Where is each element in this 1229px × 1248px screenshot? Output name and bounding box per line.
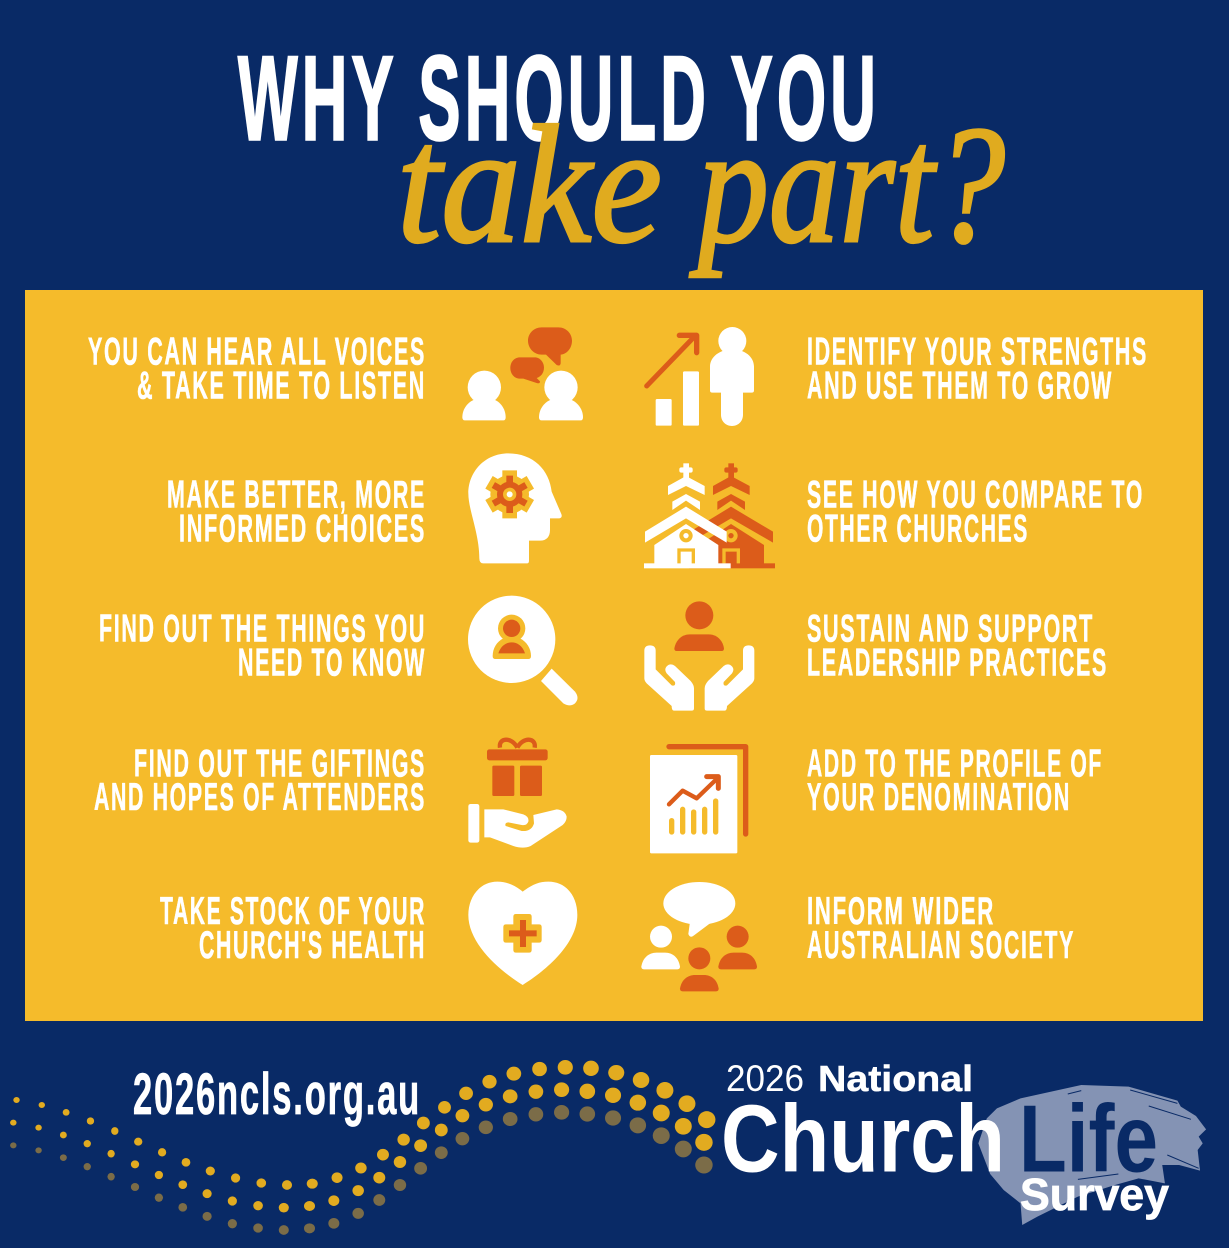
national: National — [818, 1058, 973, 1099]
brush stroke — [978, 1085, 1206, 1225]
year: 2026 — [726, 1058, 804, 1099]
text: hear all voices: YOU CAN HEAR ALL VOICES — [88, 330, 426, 374]
survey: Survey — [1020, 1169, 1169, 1220]
icon: two people talking — [462, 327, 583, 420]
text: giftings and hopes — [94, 742, 426, 819]
text: better choices — [167, 474, 426, 550]
panel: reasons — [25, 290, 1203, 1021]
text: wider society — [807, 890, 1075, 967]
logo: national church life survey — [721, 1058, 1206, 1225]
text: hear all voices — [88, 330, 426, 408]
church: Church — [721, 1086, 1005, 1192]
text: need to know: NEED TO KNOW — [238, 642, 426, 684]
icon: two churches — [644, 463, 775, 568]
text: church health — [160, 890, 426, 967]
text: better choices: INFORMED CHOICES — [179, 508, 426, 550]
icon: hands supporting a person — [644, 601, 754, 711]
title: take part?: take — [397, 92, 662, 278]
text: wider society: INFORM WIDER — [807, 890, 995, 933]
icon: hand with gift — [468, 740, 567, 848]
text: strengths — [807, 330, 1148, 408]
website url: 2026ncls.org.au — [133, 1062, 421, 1127]
title: take part?: part? — [690, 92, 1005, 278]
text: compare — [807, 474, 1144, 550]
text: hear all voices: & TAKE TIME TO LISTEN — [137, 364, 426, 408]
icon: head with gear — [468, 453, 562, 563]
icon: magnifier with person — [468, 596, 577, 705]
text: compare: OTHER CHURCHES — [807, 508, 1029, 550]
text: leadership — [807, 608, 1108, 684]
decorative dotted wave — [10, 1060, 715, 1235]
text: giftings and hopes: FIND OUT THE GIFTINGS — [134, 742, 426, 786]
title: take part? — [397, 92, 1005, 278]
text: giftings and hopes: AND HOPES OF ATTENDERS — [94, 776, 426, 819]
text: better choices: MAKE BETTER, MORE — [167, 474, 426, 516]
text: church health: TAKE STOCK OF YOUR — [160, 890, 426, 933]
text: church health: CHURCH'S HEALTH — [199, 924, 426, 967]
front church — [644, 463, 731, 568]
text: denomination — [807, 742, 1103, 819]
icon: heart with cross — [468, 882, 577, 985]
life: Life — [1019, 1086, 1158, 1192]
icon: report with trend chart — [650, 747, 746, 853]
rear church — [689, 463, 775, 568]
text: need to know: FIND OUT THE THINGS YOU — [99, 608, 426, 650]
text: need to know — [99, 608, 426, 684]
icon: growth chart and person — [647, 327, 754, 426]
icon: group with speech bubble — [641, 882, 757, 991]
